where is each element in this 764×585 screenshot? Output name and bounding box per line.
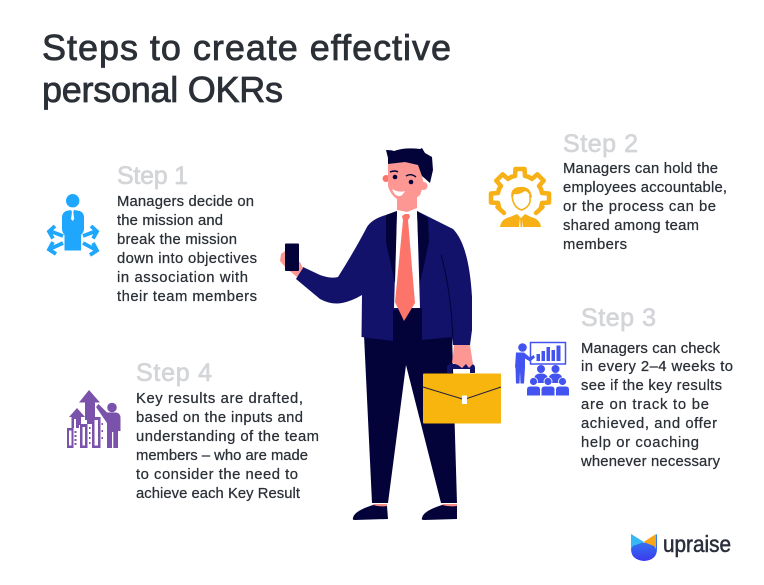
hair bbox=[386, 148, 433, 183]
heading: step 3: Step 3 bbox=[581, 304, 656, 332]
logo mark bbox=[631, 534, 657, 561]
illustration: businessman with briefcase bbox=[280, 148, 501, 520]
icon: growth arrows and person bbox=[67, 390, 120, 448]
panel: step 1 text bbox=[117, 162, 257, 305]
trousers bbox=[364, 335, 457, 503]
text block: step 2 description bbox=[563, 161, 727, 253]
text block: step 3 description bbox=[580, 341, 733, 470]
text block: step 1 description: in association with bbox=[117, 270, 248, 286]
text block: step 1 description: their team members bbox=[117, 289, 257, 305]
text block: step 3 description: see if the key results bbox=[581, 378, 722, 394]
text block: step 1 description: Managers decide on bbox=[117, 194, 254, 210]
title: personal OKRs bbox=[42, 69, 283, 110]
text block: step 4 description: based on the inputs and bbox=[136, 410, 303, 426]
heading: step 1: Step 1 bbox=[117, 162, 188, 190]
text block: step 4 description: understanding of the team bbox=[136, 429, 319, 445]
smile bbox=[392, 189, 405, 196]
text block: step 1 description: break the mission bbox=[117, 232, 237, 248]
phone bbox=[285, 244, 299, 271]
text block: step 4 description: to consider the need to bbox=[136, 467, 298, 483]
text block: step 2 description: members bbox=[563, 237, 627, 253]
text block: step 3 description: in every 2–4 weeks to bbox=[581, 359, 733, 375]
text block: step 3 description: whenever necessary bbox=[580, 454, 721, 470]
icon: person in gear bbox=[491, 169, 549, 227]
text block: step 3 description: are on track to be bbox=[581, 397, 709, 413]
text block: step 1 description: down into objectives bbox=[117, 251, 257, 267]
text block: step 2 description: or the process can be bbox=[563, 199, 716, 215]
text block: step 4 description: achieve each Key Result bbox=[136, 486, 300, 502]
panel: step 4 text bbox=[136, 359, 319, 502]
tie bbox=[395, 214, 415, 321]
sleeve seam bbox=[441, 255, 453, 340]
phone hand bbox=[280, 251, 303, 277]
shirt waist bbox=[393, 308, 422, 340]
jacket and sleeves bbox=[296, 211, 472, 345]
logo: upraise bbox=[631, 531, 731, 561]
eyes and eyebrows bbox=[393, 175, 397, 179]
text block: step 3 description: achieved, and offer bbox=[581, 416, 717, 432]
ankles bbox=[373, 504, 457, 507]
briefcase handle bbox=[447, 364, 475, 373]
text block: step 2 description: employees accountable, bbox=[563, 180, 727, 196]
text block: step 3 description: Managers can check bbox=[581, 341, 721, 357]
text block: step 3 description: help or coaching bbox=[581, 435, 699, 451]
text block: step 4 description bbox=[136, 391, 319, 502]
shoes bbox=[353, 505, 388, 520]
heading: step 2: Step 2 bbox=[563, 130, 638, 158]
lapels bbox=[386, 211, 429, 283]
briefcase hand bbox=[452, 345, 473, 368]
briefcase bbox=[423, 374, 501, 424]
icon: manager with four arrows bbox=[49, 194, 97, 255]
icon: presenter and audience bbox=[515, 342, 569, 396]
shirt bbox=[394, 208, 420, 308]
panel: step 2 text bbox=[563, 130, 727, 253]
panel: step 3 text bbox=[580, 304, 733, 470]
neck and face bbox=[397, 196, 417, 212]
logo wordmark: upraise bbox=[663, 531, 731, 557]
title: Steps to create effective bbox=[42, 27, 451, 68]
title bbox=[42, 27, 451, 110]
heading: step 4: Step 4 bbox=[136, 359, 212, 387]
text block: step 1 description bbox=[117, 194, 257, 305]
text block: step 1 description: the mission and bbox=[117, 213, 223, 229]
text block: step 4 description: Key results are drafted, bbox=[136, 391, 303, 407]
text block: step 2 description: Managers can hold the bbox=[563, 161, 718, 177]
text block: step 2 description: shared among team bbox=[563, 218, 699, 234]
text block: step 4 description: members – who are made bbox=[136, 448, 308, 464]
